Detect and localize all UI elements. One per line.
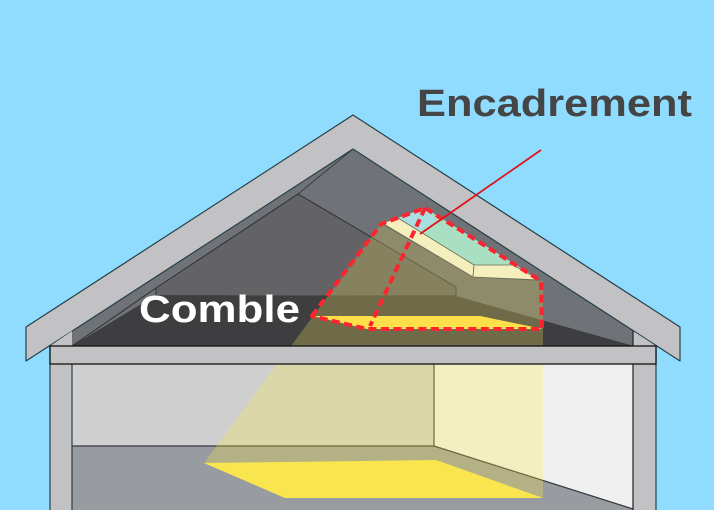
left wall: [50, 331, 72, 510]
room floor light patch: [204, 460, 543, 498]
label: Encadrement: Encadrement: [417, 83, 692, 125]
ceiling beam: [50, 346, 656, 364]
roof: [26, 115, 680, 361]
room interior: [72, 364, 633, 510]
skylight window: [382, 208, 540, 280]
attic shaft outline: dashed: [312, 208, 542, 329]
leader line: [420, 150, 541, 234]
attic light cone: [291, 224, 543, 346]
label: Comble: Comble: [139, 289, 300, 331]
room light cone: [204, 364, 543, 498]
right wall: [633, 331, 656, 510]
attic interior: [72, 149, 634, 346]
attic floor light patch: [313, 316, 543, 329]
